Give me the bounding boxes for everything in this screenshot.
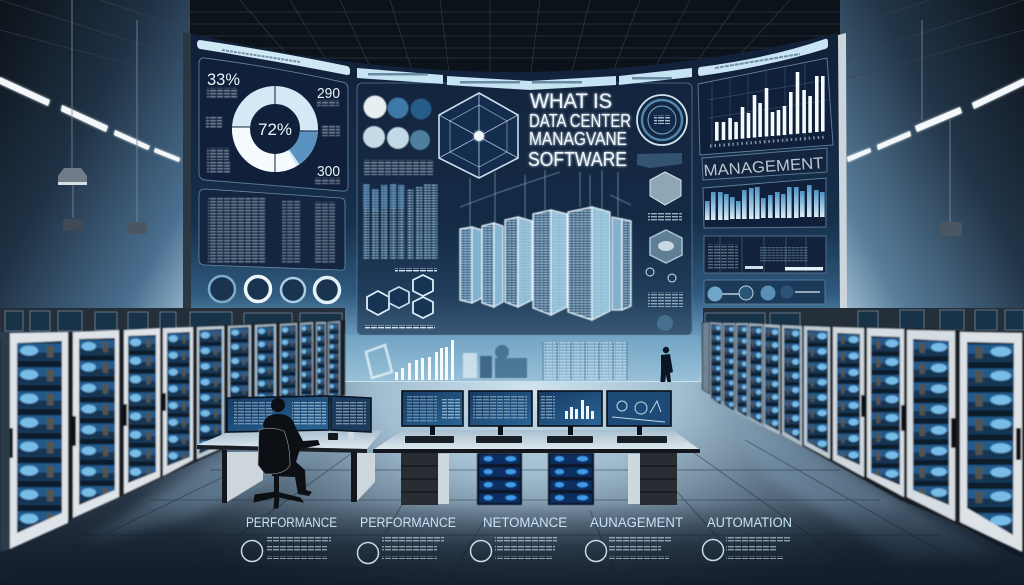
holographic server racks xyxy=(460,170,631,320)
rack L6 xyxy=(228,325,251,445)
rack R3 xyxy=(867,328,906,497)
rack R4 xyxy=(833,327,865,477)
rack R12 xyxy=(703,322,709,393)
server rack row left xyxy=(0,320,345,552)
rack L4 xyxy=(162,327,193,476)
rack L11 xyxy=(328,321,340,405)
ring 4 xyxy=(314,278,340,302)
rack shadow backing xyxy=(0,320,345,552)
ring 3 xyxy=(281,278,305,302)
floor xyxy=(0,382,1024,585)
small status bar xyxy=(637,153,682,168)
monitor 2 xyxy=(469,391,532,443)
side captions xyxy=(206,88,340,184)
rack R10 xyxy=(723,323,735,413)
ring 1 xyxy=(209,276,235,302)
left drawer cabinet xyxy=(401,453,449,505)
floor tile lines xyxy=(0,440,1000,585)
panel: centre display xyxy=(357,83,692,335)
rack L2 xyxy=(71,330,119,518)
server unit 2 xyxy=(548,453,594,505)
rack R5 xyxy=(804,326,830,459)
left desk top xyxy=(197,430,383,449)
ring 2 xyxy=(246,276,270,302)
left desk panel xyxy=(227,452,263,502)
heading: AUNAGEMENT xyxy=(590,515,683,530)
chart grid xyxy=(708,62,828,148)
icon xyxy=(586,540,606,562)
feature: performance xyxy=(242,515,337,562)
panel: donut chart xyxy=(199,58,348,191)
workflow circles xyxy=(704,280,825,304)
banner text: MANAGEMENT xyxy=(703,155,824,180)
server rack row right xyxy=(702,322,1024,552)
hanging lamps xyxy=(58,0,962,236)
screen right frame xyxy=(838,33,847,312)
feature: aunagement xyxy=(586,515,683,562)
monitor 4 xyxy=(607,391,671,443)
feature: performance second xyxy=(358,515,456,564)
wide monitor xyxy=(227,396,329,432)
rack shadow backing xyxy=(702,322,1024,552)
heading: NETOMANCE xyxy=(483,515,567,530)
rack L1 xyxy=(10,332,68,549)
rack L3 xyxy=(122,328,160,494)
rack B xyxy=(482,223,503,307)
description xyxy=(267,537,331,559)
rack R2 xyxy=(907,330,956,521)
rack L9 xyxy=(300,322,313,419)
panel: bar chart right xyxy=(698,58,833,155)
bar chart: centre xyxy=(363,184,438,259)
description xyxy=(726,537,790,559)
rack L10 xyxy=(316,322,326,412)
feature icons grid xyxy=(363,96,434,175)
stat: 300: 300 xyxy=(317,163,340,180)
donut value: 72% xyxy=(258,120,292,139)
rack D xyxy=(533,210,567,315)
rack L7 xyxy=(255,324,276,435)
main desk top xyxy=(373,430,700,450)
ceiling grid xyxy=(0,0,1024,80)
grid block xyxy=(543,342,627,380)
monitor 1 xyxy=(402,391,463,443)
hexagon radar graphic xyxy=(439,93,518,178)
left desk workstation xyxy=(197,396,383,508)
rack L8 xyxy=(280,323,297,427)
wall display screen xyxy=(183,32,847,385)
description xyxy=(495,537,557,559)
ascending chart xyxy=(395,340,454,380)
rack R8 xyxy=(749,323,763,427)
rack R9 xyxy=(736,323,748,419)
rack L0 edge xyxy=(0,333,10,552)
heading: PERFORMANCE xyxy=(246,515,337,530)
title line 2: DATA CENTER xyxy=(529,111,631,131)
status rings xyxy=(209,276,340,302)
icon xyxy=(470,540,492,562)
back row of racks right xyxy=(703,308,1024,332)
stat: 290: 290 xyxy=(317,85,340,102)
ceiling lights left xyxy=(0,77,180,162)
rack E xyxy=(568,207,610,320)
rack R6 xyxy=(782,325,802,446)
rack C xyxy=(505,217,532,307)
rack R7 xyxy=(764,324,780,435)
rack R11 xyxy=(710,322,722,407)
panel: data table xyxy=(199,189,345,270)
back row of racks left xyxy=(0,308,345,332)
lower holographic band xyxy=(345,335,700,382)
ceiling lights right xyxy=(847,78,1024,162)
title line 4: SOFTWARE xyxy=(528,149,627,171)
right header bar xyxy=(698,39,828,76)
icon xyxy=(242,540,262,562)
title line 3: MANAGVANE xyxy=(529,129,627,149)
left desk legs xyxy=(222,450,227,503)
rack A xyxy=(460,227,482,303)
right drawer cabinet xyxy=(628,453,677,505)
control room scene xyxy=(366,345,527,378)
feature: automation xyxy=(702,515,792,560)
right side icons column xyxy=(646,172,683,331)
donut xyxy=(229,83,321,175)
feature: netomance xyxy=(470,515,567,562)
rack reflections on floor xyxy=(80,395,1000,560)
monitor 3 xyxy=(538,391,602,443)
heading: PERFORMANCE xyxy=(360,515,456,530)
panel: bar chart blue xyxy=(703,178,826,228)
left header bar xyxy=(197,40,350,75)
stat: 33%: 33% xyxy=(207,70,240,89)
rack L5 xyxy=(197,326,224,459)
server unit 1 xyxy=(477,453,522,505)
title line 1: WHAT IS xyxy=(530,90,612,113)
panel: mini charts xyxy=(704,236,826,273)
icon xyxy=(702,540,724,560)
hexagon icons cluster xyxy=(365,268,437,329)
icon xyxy=(358,542,378,564)
screen left frame xyxy=(183,32,191,312)
main title xyxy=(528,90,631,171)
description xyxy=(382,537,444,559)
circular gauge xyxy=(637,95,687,145)
description xyxy=(609,537,671,559)
heading: AUTOMATION xyxy=(707,515,792,530)
main desk with four monitors xyxy=(373,391,700,505)
hologram wires xyxy=(460,170,631,227)
rack R1 xyxy=(960,332,1022,552)
side monitor xyxy=(331,396,371,432)
left desk right panel xyxy=(356,453,375,502)
centre header bars xyxy=(357,68,692,90)
standing person silhouette xyxy=(660,347,673,391)
white bars xyxy=(715,72,825,141)
management banner xyxy=(702,148,827,180)
rack F xyxy=(612,217,631,310)
seated operator and chair xyxy=(254,398,320,508)
